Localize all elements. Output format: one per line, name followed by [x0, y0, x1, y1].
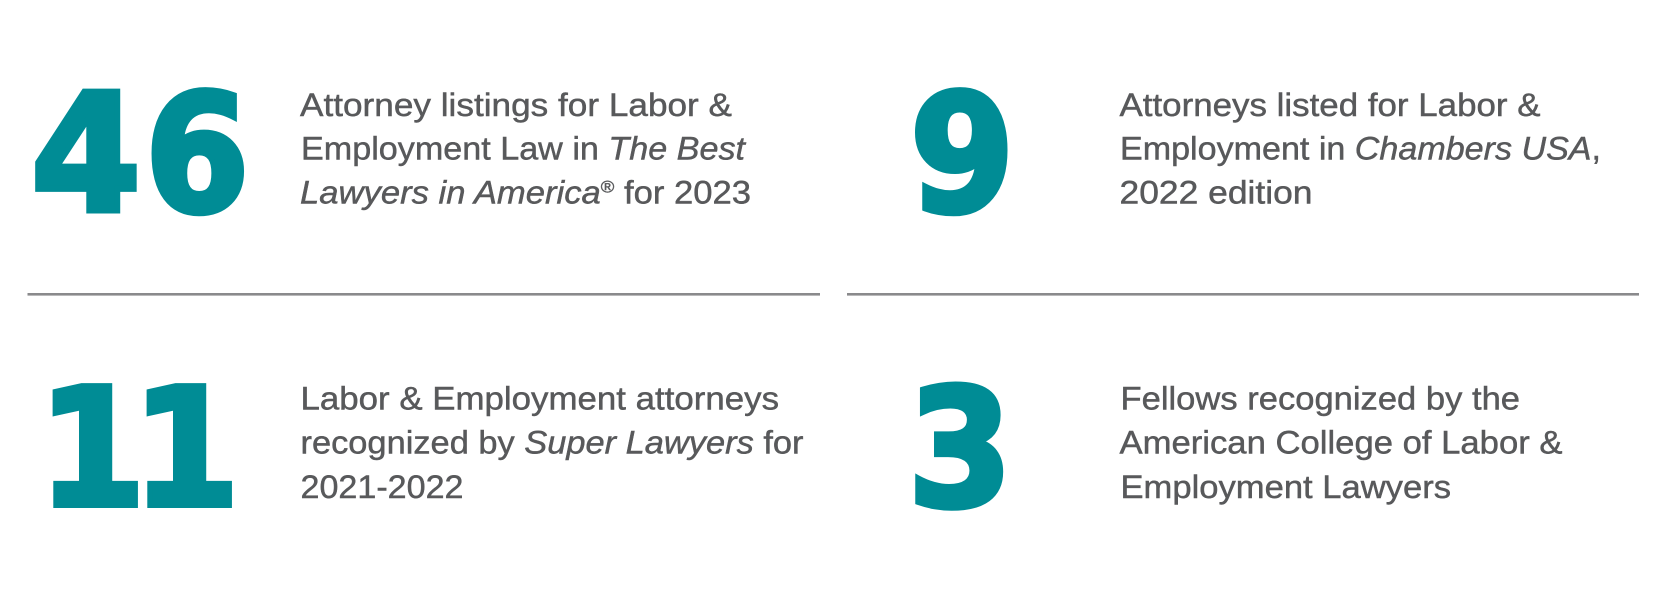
panel: Super Lawyers recognition	[38, 354, 804, 544]
text: American College description	[1120, 380, 1562, 505]
text: Best Lawyers description: for 2023	[614, 174, 751, 210]
panel: Best Lawyers listings	[31, 59, 751, 250]
text: Super Lawyers description: 2021-2022	[300, 469, 464, 505]
text: Chambers USA description	[1120, 87, 1601, 210]
number: 46: 4	[31, 59, 141, 249]
number: 46: 6	[145, 60, 249, 250]
text: Best Lawyers description: Employment Law in The Best	[301, 130, 746, 166]
text: Super Lawyers description	[300, 380, 804, 505]
text: American College description: Fellows recognized by the	[1120, 380, 1520, 416]
number: 11	[38, 354, 240, 544]
number: 46	[31, 59, 249, 250]
text: Chambers USA description: Attorneys listed for Labor &	[1120, 87, 1540, 123]
text: Best Lawyers description: ®	[601, 178, 615, 196]
text: Best Lawyers description	[300, 87, 751, 210]
divider: left	[28, 293, 820, 296]
text: American College description: Employment Lawyers	[1120, 469, 1451, 505]
divider: right	[847, 293, 1639, 296]
panel: American College fellows	[908, 355, 1562, 544]
text: Best Lawyers description: Lawyers in America	[300, 174, 601, 210]
number: 9: 9	[910, 60, 1014, 250]
text: Best Lawyers description: Attorney listings for Labor &	[300, 87, 732, 123]
text: Super Lawyers description: Labor & Employment attorneys	[300, 380, 779, 416]
number: 11: 1	[38, 354, 146, 544]
panel: Chambers USA listings	[910, 60, 1601, 250]
text: American College description: American College of Labor &	[1120, 424, 1562, 460]
text: Super Lawyers description: recognized by Super Lawyers for	[300, 424, 804, 460]
text: Chambers USA description: 2022 edition	[1120, 174, 1312, 210]
number: 11: 1	[132, 354, 240, 544]
number: 3: 3	[908, 355, 1012, 544]
text: Chambers USA description: Employment in Chambers USA ,	[1120, 130, 1601, 166]
